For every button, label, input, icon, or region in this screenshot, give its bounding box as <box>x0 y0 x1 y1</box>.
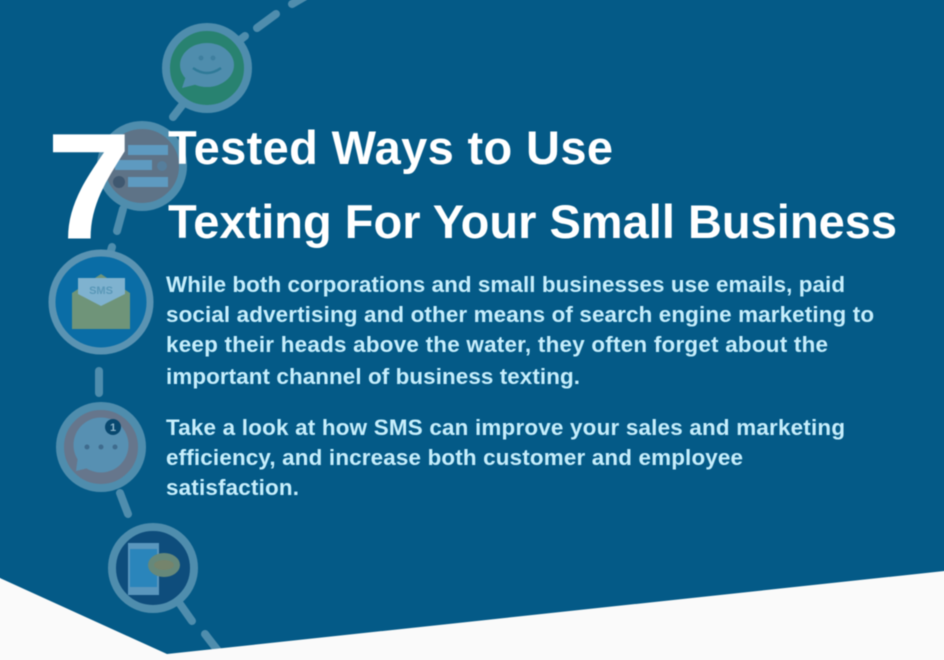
second paragraph: satisfaction. <box>166 475 299 500</box>
icon: chat message list <box>101 125 183 207</box>
label: SMS: SMS <box>89 285 113 297</box>
second paragraph <box>166 415 845 500</box>
title: Tested Ways to Use <box>168 121 613 174</box>
intro paragraph: While both corporations and small businesses use emails, paid <box>166 272 845 297</box>
icon: SMS envelope <box>52 253 150 351</box>
bottom white wedge <box>0 570 944 660</box>
icon: typing bubble with badge <box>60 406 142 488</box>
second paragraph: efficiency, and increase both customer and employee <box>166 445 743 470</box>
title <box>168 121 897 248</box>
big number 7: 7 <box>47 102 131 270</box>
intro paragraph <box>166 272 874 389</box>
dashed connector path <box>99 0 304 656</box>
intro paragraph: important channel of business texting. <box>166 364 580 389</box>
intro paragraph: social advertising and other means of search engine marketing to <box>166 302 874 327</box>
label: badge number: 1 <box>110 422 116 434</box>
icon: smiley chat bubble <box>166 27 248 109</box>
title: Texting For Your Small Business <box>168 195 897 248</box>
icon: phone with speech bubble <box>112 527 194 609</box>
second paragraph: Take a look at how SMS can improve your sales and marketing <box>166 415 845 440</box>
intro paragraph: keep their heads above the water, they often forget about the <box>166 332 828 357</box>
